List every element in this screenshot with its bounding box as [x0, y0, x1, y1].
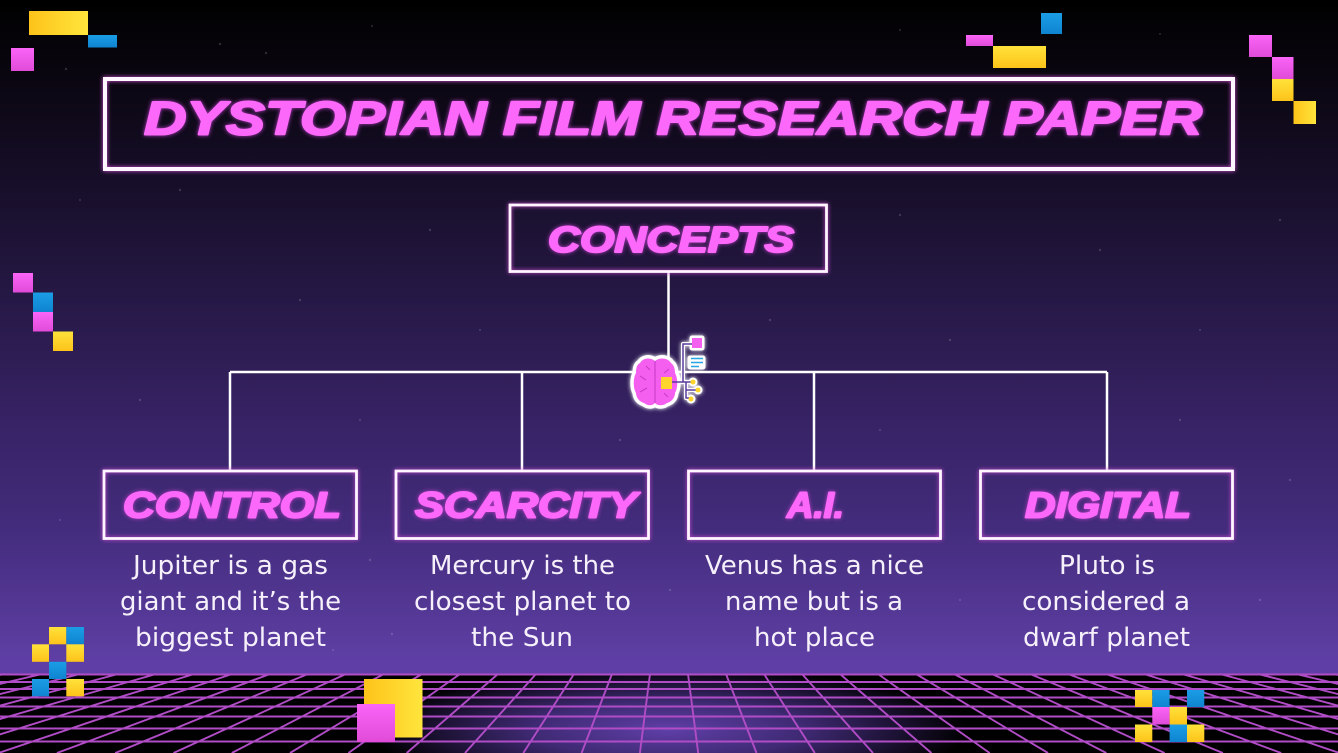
icon: brain with circuit	[634, 338, 703, 405]
text block: control description: biggest planet	[135, 623, 326, 653]
text block: digital description: Pluto is	[1059, 551, 1155, 581]
panel: digital	[980, 471, 1232, 538]
text block: control description: giant and it’s the	[120, 587, 341, 617]
text block: control description	[120, 551, 341, 653]
pixel decoration: top left	[11, 11, 117, 71]
heading: scarcity: SCARCITY	[415, 484, 641, 526]
text block: digital description: considered a	[1022, 587, 1190, 617]
text block: scarcity description: the Sun	[471, 623, 573, 653]
text block: control description: Jupiter is a gas	[131, 551, 328, 581]
concepts heading: CONCEPTS	[548, 219, 794, 260]
heading: digital: DIGITAL	[1025, 484, 1191, 526]
text block: scarcity description: Mercury is the	[430, 551, 615, 581]
pixel decoration: bottom right	[1135, 690, 1204, 742]
pixel decoration: top right stairs	[1249, 35, 1316, 124]
text block: digital description: dwarf planet	[1023, 623, 1190, 653]
title: DYSTOPIAN FILM RESEARCH PAPER	[144, 92, 1202, 144]
text block: a.i. description	[705, 551, 924, 653]
text block: a.i. description: name but is a	[725, 587, 903, 617]
panel: a.i.	[688, 471, 940, 538]
text block: a.i. description: hot place	[754, 623, 875, 653]
text block: a.i. description: Venus has a nice	[705, 551, 924, 581]
pixel decoration: bottom left	[32, 627, 84, 696]
pixel decoration: bottom centre squares	[357, 679, 422, 742]
heading: control: CONTROL	[123, 484, 341, 526]
panel: scarcity	[396, 471, 648, 538]
title panel	[105, 79, 1233, 169]
pixel decoration: top centre right	[966, 13, 1062, 68]
panel: control	[104, 471, 356, 538]
neon perspective grid floor	[0, 674, 1338, 753]
text block: scarcity description	[414, 551, 631, 653]
pixel decoration: left stairs	[13, 273, 73, 351]
concepts box	[510, 205, 826, 272]
text block: digital description	[1022, 551, 1190, 653]
heading: a.i.: A.I.	[786, 484, 844, 526]
connector lines	[230, 272, 1107, 470]
text block: scarcity description: closest planet to	[414, 587, 631, 617]
